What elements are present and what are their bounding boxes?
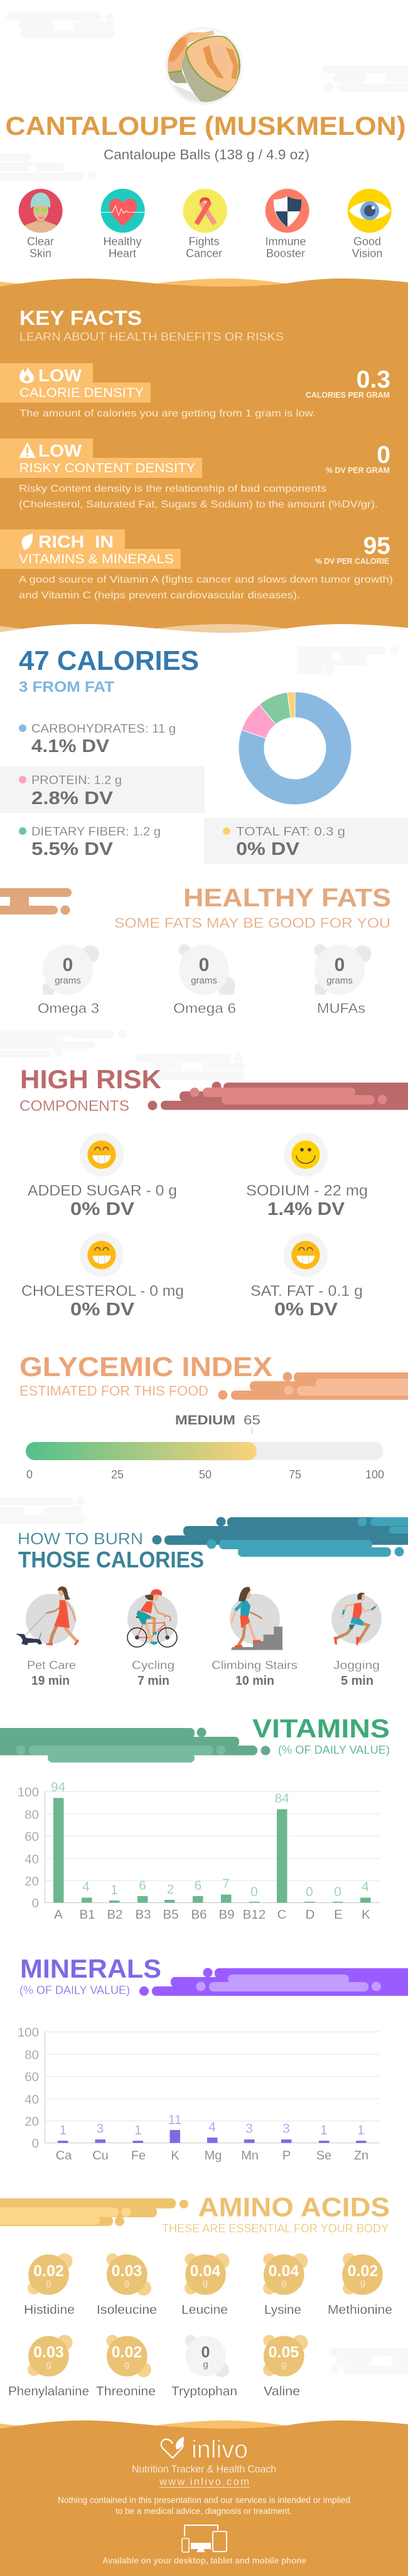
donut chart [239,692,352,805]
decorative blob [139,1968,408,1996]
fact: risky content density: LOW [38,441,82,460]
amino: threonine: 0.02 [112,2344,142,2361]
amino: methionine: Methionine [328,2303,392,2317]
fact: rich in vitamins and minerals: and Vitamin C (helps prevent cardiovascular diseases). [19,590,300,601]
activity: pet care: Pet Care [27,1658,76,1672]
gauge: 100 [365,1468,384,1481]
bar chart: minerals: 3 [245,2122,253,2136]
item: saturated fat [250,1233,363,1320]
label: Cancer [186,247,222,260]
legend: dietary fiber: DIETARY FIBER: 1.2 g [31,825,161,839]
fact: rich in vitamins and minerals [0,529,393,601]
heading: AMINO ACIDS [198,2193,390,2223]
amino: phenylalanine: 0.03 [33,2344,64,2361]
icon: fights cancer ribbon [183,189,227,260]
item: omega 3: grams [55,975,81,986]
item: cholesterol: CHOLESTEROL - 0 mg [21,1283,184,1300]
heading: GLYCEMIC INDEX [19,1352,272,1382]
heading: MINERALS [20,1954,161,1983]
subheading: THESE ARE ESSENTIAL FOR YOUR BODY [162,2222,389,2235]
item: omega 3: 0 [63,955,73,975]
panel: high risk components [19,1064,408,1320]
bar chart: minerals: 20 [24,2114,39,2129]
fact: calorie density [0,363,390,419]
panel: amino acids [0,2193,392,2398]
decorative blob [148,1081,408,1110]
item: sodium: SODIUM - 22 mg [246,1182,368,1199]
label: Heart [109,247,136,260]
decorative blob [0,2198,188,2226]
bar chart: vitamins: 4 [362,1880,369,1894]
bar chart: vitamins: 6 [139,1879,146,1893]
fact: risky content density [0,438,390,510]
item: omega 3: Omega 3 [38,1000,99,1016]
bar chart: minerals: 3 [282,2122,290,2136]
item: omega 6: 0 [199,955,209,975]
activity: cycling: 7 min [137,1674,169,1688]
item: mufas: grams [326,975,353,986]
item: saturated fat: SAT. FAT - 0.1 g [250,1283,363,1300]
amino: histidine: 0.02 [33,2262,64,2280]
label: Fights [188,235,220,248]
bar chart: minerals: Cu [92,2149,109,2163]
bar chart: minerals: 3 [97,2122,104,2136]
amino: tryptophan: Tryptophan [171,2385,237,2398]
bar chart: vitamins: 84 [274,1791,289,1806]
panel: how to burn those calories [16,1517,408,1688]
icon: clear skin [18,189,63,260]
legend: dietary fiber [19,825,161,859]
bar chart: minerals: 1 [60,2123,67,2138]
bar chart: vitamins: C [277,1907,287,1922]
legend: carbohydrates: CARBOHYDRATES: 11 g [31,722,176,736]
amino: isoleucine: Isoleucine [97,2303,157,2317]
bar chart: minerals: Zn [354,2149,368,2163]
item: mufas: MUFAs [317,1000,365,1016]
bar chart: vitamins: 94 [51,1780,65,1794]
bar chart: vitamins: B5 [163,1907,179,1922]
bar chart: minerals: Mg [205,2149,222,2163]
amino: leucine: 0.04 [190,2262,220,2280]
activity: jogging: 5 min [341,1674,373,1688]
amino: valine: Valine [264,2385,300,2398]
amino: valine: 0.05 [269,2344,299,2361]
logo: inlivo [161,2436,248,2464]
icon: cantaloupe photo [165,27,243,105]
panel: vitamins [0,1714,390,1922]
amino: tryptophan: 0 [201,2344,210,2361]
fact: rich in vitamins and minerals: % DV PER CALORIE [315,557,389,566]
bar chart: vitamins: B12 [243,1907,266,1922]
gauge: 0 [26,1468,33,1481]
gauge: MEDIUM [175,1413,235,1428]
amino: leucine: g [203,2277,208,2288]
bar chart: minerals [18,2025,380,2163]
bar chart: vitamins: D [306,1907,314,1922]
disclaimer [58,2495,350,2516]
bar chart: vitamins: 2 [167,1882,174,1897]
bar chart: vitamins: B6 [191,1907,207,1922]
panel: minerals [18,1954,408,2163]
item: added sugar: 0% DV [70,1199,135,1219]
icon: warning triangle [19,442,36,458]
gauge: 50 [199,1468,212,1481]
fact: calorie density: The amount of calories you are getting from 1 gram is low. [19,408,316,419]
website: www.inlivo.com [159,2476,249,2488]
fact: risky content density: RISKY CONTENT DENSITY [19,461,196,475]
item: omega 6 [173,945,236,1016]
amino: valine: g [281,2360,286,2370]
disclaimer: to be a medical advice, diagnosis or treatment. [115,2506,292,2516]
fact: rich in vitamins and minerals: RICH IN [38,532,114,551]
bar chart: vitamins: 7 [222,1877,230,1891]
amino: methionine: g [360,2277,365,2288]
subheading: ESTIMATED FOR THIS FOOD [19,1383,208,1399]
icon: devices [182,2525,227,2552]
label: Vision [352,247,382,260]
amino: lysine [263,2253,308,2317]
title: CANTALOUPE (MUSKMELON) [5,111,405,140]
item: omega 6: grams [191,975,217,986]
legend: protein: PROTEIN: 1.2 g [31,773,122,787]
bar chart: minerals: Se [316,2149,331,2163]
bar chart: vitamins: 60 [24,1830,39,1844]
bar chart: minerals: 11 [168,2113,181,2128]
gauge: 75 [289,1468,301,1481]
legend: total fat: TOTAL FAT: 0.3 g [236,825,345,839]
amino: histidine: g [46,2277,51,2288]
bar chart: minerals: K [171,2149,180,2163]
amino: lysine: 0.04 [269,2262,299,2280]
activity: climbing stairs: Climbing Stairs [212,1658,298,1672]
bar chart: minerals: Mn [241,2149,259,2163]
amino: phenylalanine: g [46,2360,51,2370]
item: omega 3 [38,945,99,1016]
item: added sugar [28,1133,177,1219]
bar chart: minerals: 0 [32,2136,39,2151]
label: Clear [27,235,54,248]
bar chart: vitamins: B1 [79,1907,95,1922]
amino: leucine: Leucine [181,2303,228,2317]
heading: VITAMINS [252,1714,390,1743]
bar chart: vitamins: B3 [135,1907,151,1922]
heading: HIGH RISK [20,1064,161,1094]
panel: calories [0,645,408,864]
bar chart: minerals: P [282,2149,291,2163]
legend: carbohydrates [19,722,176,756]
gauge: 65 [244,1413,260,1428]
bar chart: minerals: 1 [320,2123,328,2138]
heading: HEALTHY FATS [183,883,391,912]
panel: healthy fats [0,883,391,1016]
activity: cycling [127,1589,178,1688]
item: cholesterol: 0% DV [70,1300,135,1320]
amino: threonine: Threonine [96,2385,156,2398]
bar chart: minerals: 40 [24,2092,39,2107]
panel: glycemic index [19,1352,408,1481]
heading: KEY FACTS [19,307,142,329]
activity: pet care [16,1586,79,1688]
bar chart: vitamins: 0 [32,1896,39,1911]
amino: tryptophan [171,2335,237,2398]
amino: threonine: g [124,2360,129,2370]
activity: cycling: Cycling [132,1658,174,1672]
amino: valine [263,2335,308,2398]
bar chart: vitamins: 0 [250,1885,258,1899]
bar chart: vitamins: B2 [107,1907,123,1922]
bar chart: minerals: 1 [357,2123,365,2138]
amino: threonine [96,2335,156,2398]
fact: risky content density: % DV PER GRAM [326,466,390,475]
item: mufas [314,945,372,1016]
decorative blob [218,1372,408,1400]
label: Good [353,235,381,248]
bar chart: vitamins: A [54,1907,63,1922]
fact: calorie density: 0.3 [357,366,390,393]
disclaimer: Nothing contained in this presentation and our services is intended or implied [58,2495,350,2505]
subheading: COMPONENTS [19,1098,129,1115]
subheading: SOME FATS MAY BE GOOD FOR YOU [114,915,390,931]
subtitle: serving size: Cantaloupe Balls (138 g / 4.9 oz) [104,147,309,162]
fact: risky content density: Risky Content density is the relationship of bad components [19,484,326,494]
activity: jogging: Jogging [333,1658,380,1672]
legend: dietary fiber: 5.5% DV [31,839,114,859]
bar chart: minerals: Ca [56,2149,72,2163]
fact: risky content density: (Cholesterol, Saturated Fat, Sugars & Sodium) to the amount (%DV/gr). [19,499,378,510]
activity: jogging [331,1593,382,1688]
item: cholesterol [21,1233,184,1320]
item: mufas: 0 [335,955,345,975]
decorative blob [0,1727,270,1762]
subheading: LEARN ABOUT HEALTH BENEFITS OR RISKS [19,330,284,343]
icon: flame [19,366,34,383]
amino: histidine [24,2253,75,2317]
amino: phenylalanine: Phenylalanine [8,2385,89,2398]
legend: protein [19,773,122,808]
bar chart: minerals: 100 [18,2025,39,2040]
panel: footer [0,2420,408,2576]
fact: rich in vitamins and minerals: A good source of Vitamin A (fights cancer and slows down tumor growth) [19,575,393,585]
amino: phenylalanine [8,2335,89,2398]
availability note: Available on your desktop, tablet and mobile phone [102,2555,306,2565]
item: omega 6: Omega 6 [173,1000,236,1016]
bar chart: vitamins: K [362,1907,370,1922]
icon: good vision eye [348,189,392,260]
amino: lysine: Lysine [264,2303,301,2317]
heading bold: THOSE CALORIES [18,1547,204,1572]
bar chart: vitamins: 40 [24,1852,39,1867]
heading: HOW TO BURN [18,1530,143,1548]
activity: climbing stairs [212,1587,298,1688]
bar chart: minerals: 1 [134,2123,142,2138]
heading: 47 CALORIES [19,645,199,676]
bar chart: vitamins: 80 [24,1808,39,1822]
activity: pet care: 19 min [31,1674,70,1688]
bar chart: vitamins [18,1780,380,1922]
item: sodium [246,1133,368,1219]
icon: leaf [21,533,33,550]
amino: histidine: Histidine [24,2303,75,2317]
bar chart: vitamins: B9 [218,1907,235,1922]
logo: inlivo: inlivo [191,2436,248,2464]
activity: climbing stairs: 10 min [235,1674,274,1688]
fact: calorie density: CALORIE DENSITY [19,386,144,400]
bar chart: vitamins: 4 [82,1880,90,1894]
amino: methionine [328,2253,392,2317]
amino: isoleucine: g [124,2277,129,2288]
bar chart: vitamins: 0 [306,1885,313,1899]
amino: isoleucine [97,2253,157,2317]
label: Healthy [103,235,142,248]
fact: risky content density: 0 [377,442,390,469]
bar chart: minerals: 80 [24,2048,39,2062]
gauge: 25 [111,1468,124,1481]
item: added sugar: ADDED SUGAR - 0 g [28,1182,177,1199]
label: Immune [265,235,306,248]
amino: methionine: 0.02 [348,2262,378,2280]
decorative blob [152,1517,408,1557]
bar chart: vitamins: 20 [24,1874,39,1889]
legend: carbohydrates: 4.1% DV [31,736,110,756]
icon: immune booster shield [265,189,309,260]
fact: rich in vitamins and minerals: VITAMINS & MINERALS [19,552,174,566]
legend: total fat [223,825,345,859]
legend: protein: 2.8% DV [31,788,114,808]
fact: calorie density: LOW [38,366,82,385]
subheading: 3 FROM FAT [19,679,114,696]
bar chart: vitamins: 0 [334,1885,341,1899]
decorative blob [0,888,72,914]
icon: healthy heart [101,189,145,260]
legend: total fat: 0% DV [236,839,300,859]
bar chart: minerals: 60 [24,2070,39,2084]
item: sodium: 1.4% DV [267,1199,345,1219]
item: saturated fat: 0% DV [274,1300,338,1320]
bar chart: vitamins: E [334,1907,343,1922]
bar chart: vitamins: 6 [195,1879,201,1893]
bar chart: minerals: Fe [131,2149,146,2163]
bar chart: vitamins: 1 [110,1883,118,1897]
fact: calorie density: CALORIES PER GRAM [306,391,390,400]
amino: tryptophan: g [203,2360,208,2370]
bar chart: vitamins: 100 [18,1785,39,1799]
amino: leucine [181,2253,230,2317]
subheading: (% OF DAILY VALUE) [19,1983,130,1996]
amino: lysine: g [281,2277,286,2288]
amino: isoleucine: 0.03 [112,2262,142,2280]
label: Skin [30,247,51,260]
bar chart: minerals: 4 [208,2120,216,2134]
panel: key facts [0,278,408,640]
fact: rich in vitamins and minerals: 95 [363,533,390,559]
tagline: Nutrition Tracker & Health Coach [132,2464,276,2475]
label: Booster [266,247,305,260]
gauge [26,1413,384,1481]
subheading: (% OF DAILY VALUE) [278,1743,390,1756]
benefits row [18,189,392,260]
